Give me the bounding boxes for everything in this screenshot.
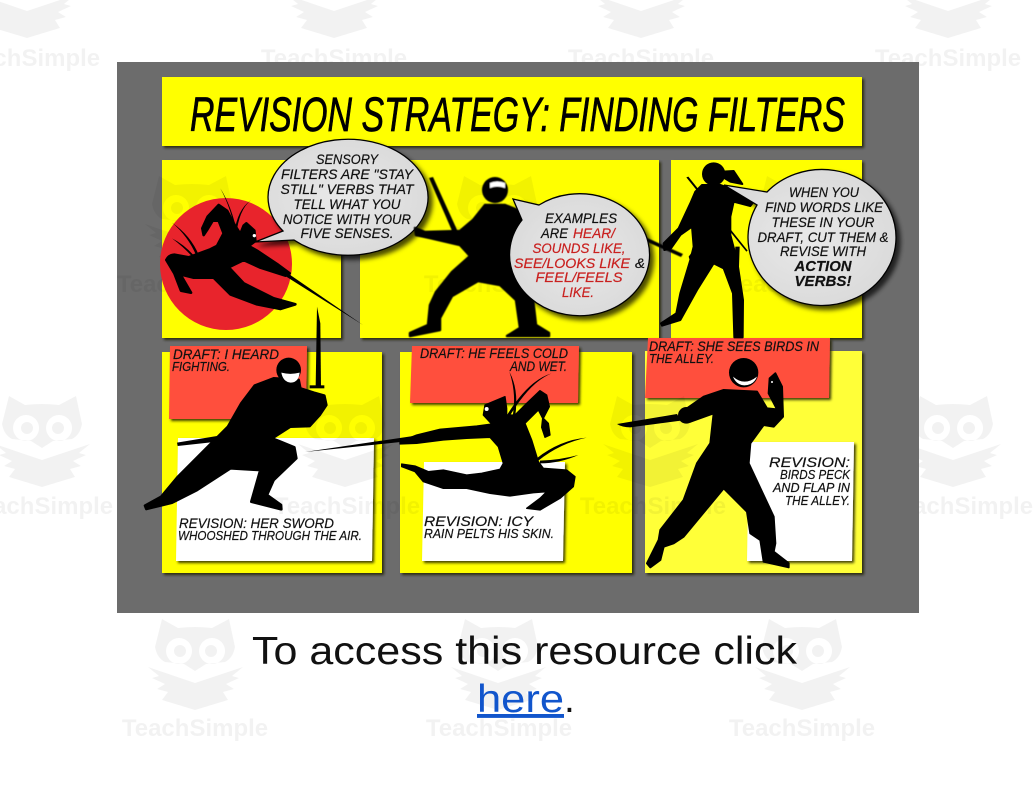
revision text: icy rain: [424, 513, 554, 541]
panel: bottom middle comic frame: [400, 352, 632, 573]
draft text: he feels cold and wet: [420, 345, 568, 374]
speech bubble: sensory filters: FIVE SENSES.: [300, 225, 394, 241]
watermark: page background TeachSimple pattern: TeachSimple: [875, 45, 1021, 72]
ninja: flying kick with sword: [305, 372, 587, 510]
speech bubble: sensory filters: TELL WHAT YOU: [294, 196, 401, 212]
draft box: bottom left: [169, 346, 307, 419]
speech bubble: action verbs: THESE IN YOUR: [772, 214, 874, 230]
draft text: she sees birds: DRAFT: SHE SEES BIRDS IN: [649, 338, 820, 354]
watermark: page background TeachSimple pattern: TeachSimple: [568, 45, 714, 72]
ninja: leaping with sword on red sun: [166, 188, 363, 325]
speech bubble: examples: EXAMPLES: [545, 210, 618, 226]
speech bubble: examples: &: [635, 255, 645, 271]
watermark: page background TeachSimple pattern: TeachSimple: [729, 715, 875, 742]
ninja: wide stance with sword: [410, 177, 683, 336]
draft text: he feels cold and wet: AND WET.: [509, 358, 567, 374]
watermark: over comic panels: [117, 176, 873, 520]
speech bubble: sensory filters: NOTICE WITH YOUR: [283, 211, 411, 227]
draft box: bottom middle: [410, 346, 579, 403]
speech bubble: examples: SEE/LOOKS LIKE: [514, 255, 631, 271]
speech bubble: examples: FEEL/FEELS: [536, 269, 623, 285]
panel: bottom right comic frame: [645, 351, 862, 573]
watermark: over comic panels: TeachSimple: [580, 493, 726, 520]
speech bubble: sensory filters: [255, 139, 428, 255]
watermark: page background TeachSimple pattern: TeachSimple: [887, 493, 1033, 520]
revision text: sword whooshed: [178, 515, 362, 543]
watermark: over comic panels: TeachSimple: [274, 493, 420, 520]
revision text: birds peck: [769, 454, 851, 508]
speech bubble: action verbs: VERBS!: [794, 273, 852, 290]
speech bubble: sensory filters: SENSORY: [316, 151, 380, 167]
speech bubble: action verbs: ACTION: [794, 258, 853, 275]
link: here: here: [477, 678, 564, 721]
watermark: page background TeachSimple pattern: TeachSimple: [426, 715, 572, 742]
speech bubble: examples: ARE: [540, 225, 569, 241]
speech bubble: examples: LIKE.: [562, 284, 594, 300]
revision text: birds peck: REVISION:: [769, 454, 850, 470]
revision text: sword whooshed: WHOOSHED THROUGH THE AIR.: [178, 528, 362, 543]
watermark: over comic panels: TeachSimple: [424, 271, 570, 298]
revision text: birds peck: THE ALLEY.: [785, 493, 850, 508]
speech bubble: sensory filters: STILL" VERBS THAT: [280, 181, 415, 197]
speech bubble: action verbs: REVISE WITH: [780, 243, 867, 259]
revision box: bottom right: [747, 442, 854, 561]
draft text: I heard fighting: [172, 346, 279, 374]
draft text: she sees birds: [649, 338, 820, 366]
icon: red sun circle: [160, 198, 292, 330]
watermark: page background TeachSimple pattern: TeachSimple: [122, 715, 268, 742]
speech bubble: sensory filters: FILTERS ARE "STAY: [281, 166, 415, 182]
speech bubble: action verbs: DRAFT, CUT THEM &: [758, 229, 888, 245]
call to action text: [252, 630, 798, 721]
speech bubble: examples: SOUNDS LIKE,: [532, 240, 626, 256]
speech bubble: examples: [510, 194, 650, 316]
revision text: icy rain: REVISION: ICY: [424, 513, 535, 529]
revision text: birds peck: BIRDS PECK: [780, 467, 851, 482]
speech bubble: examples: HEAR/: [573, 225, 617, 241]
speech bubble: action verbs: WHEN YOU: [789, 184, 860, 200]
watermark: over comic panels: TeachSimple: [727, 271, 873, 298]
watermark: page background TeachSimple pattern: TeachSimple: [261, 45, 407, 72]
panel: bottom left comic frame: [162, 352, 382, 573]
speech bubble: action verbs: FIND WORDS LIKE: [765, 199, 884, 215]
draft text: I heard fighting: DRAFT: I HEARD: [173, 346, 279, 362]
revision text: sword whooshed: REVISION: HER SWORD: [179, 515, 334, 531]
speech bubble: action verbs: [724, 169, 896, 305]
revision box: bottom middle: [422, 462, 565, 561]
draft text: she sees birds: THE ALLEY.: [649, 351, 714, 366]
title banner: [162, 77, 862, 146]
draft text: he feels cold and wet: DRAFT: HE FEELS COLD: [420, 345, 568, 361]
panel: top middle comic frame: [360, 160, 659, 338]
panel: grey background: [117, 62, 919, 613]
revision text: birds peck: AND FLAP IN: [772, 480, 851, 495]
call to action text: .: [564, 678, 575, 721]
ninja: standing with sword and raised fist: [617, 358, 789, 567]
panel: top left comic frame: [162, 160, 341, 338]
ninja: standing female figure: [661, 162, 754, 337]
revision text: icy rain: RAIN PELTS HIS SKIN.: [424, 526, 554, 541]
revision box: bottom left: [176, 438, 374, 561]
call to action text: To access this resource click: [252, 630, 798, 673]
ninja: crouching with raised sword: [145, 307, 326, 509]
draft text: I heard fighting: FIGHTING.: [172, 359, 230, 374]
watermark: over comic panels: TeachSimple: [117, 271, 263, 298]
draft box: bottom right: [645, 338, 830, 398]
panel: top right comic frame: [671, 160, 862, 338]
